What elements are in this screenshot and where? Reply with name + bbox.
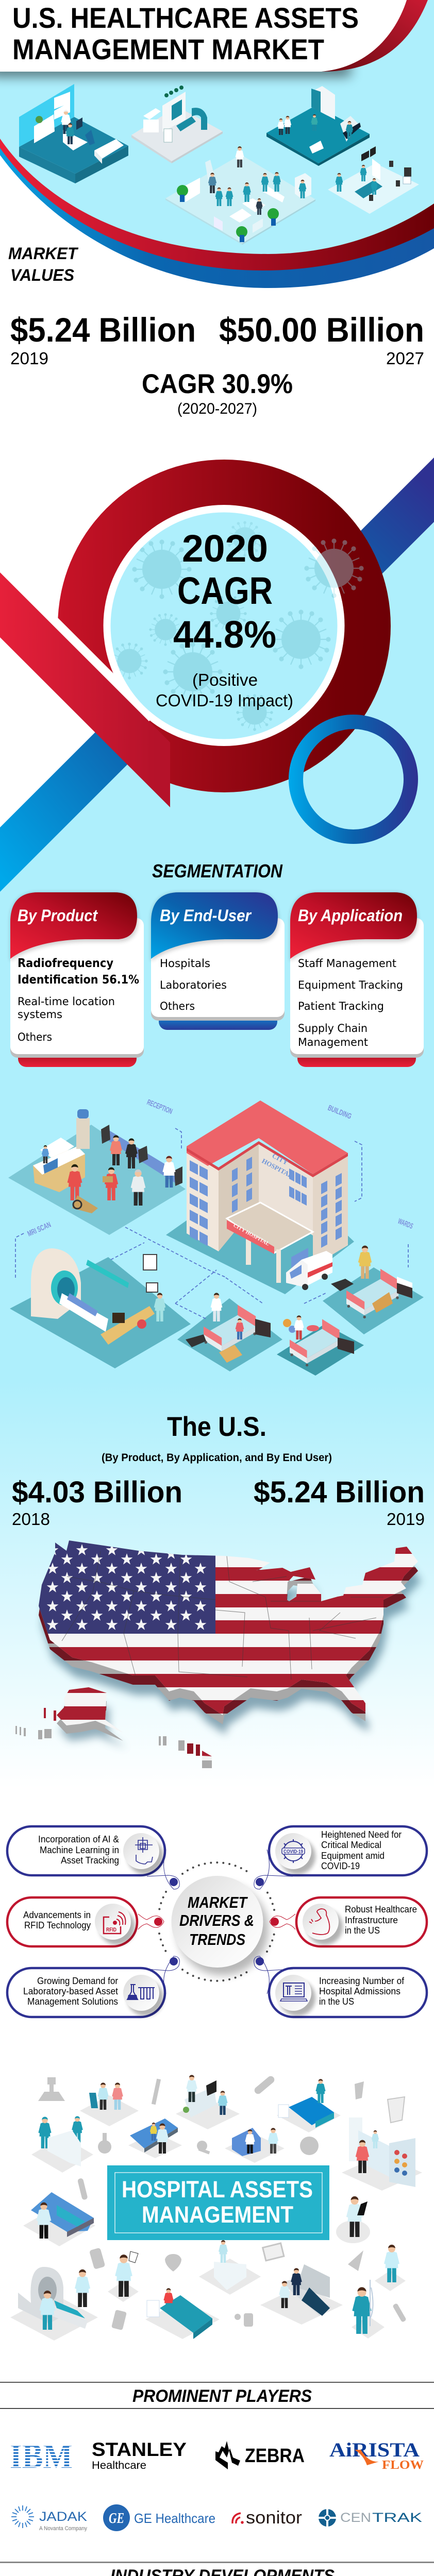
panel: by product: By Product bbox=[18, 906, 98, 925]
pill: laboratory-based solutions: Management Solutions bbox=[27, 1996, 118, 2007]
dotted ring bbox=[159, 1862, 274, 1981]
pill: critical medical equipment: Equipment amid bbox=[321, 1851, 385, 1861]
panel: by application: Equipment Tracking bbox=[298, 979, 403, 991]
panel: light-blue body background bbox=[0, 522, 434, 1803]
logo: AiRISTA Flow: AiRISTA bbox=[329, 2439, 420, 2461]
floors bbox=[10, 2095, 422, 2341]
stat: 2018 US value: 2018 bbox=[12, 1510, 50, 1529]
label: market values: MARKET bbox=[8, 244, 78, 263]
pill: AI and machine learning: Asset Tracking bbox=[61, 1855, 119, 1866]
logo: Jadak: JADAK bbox=[39, 2510, 87, 2524]
panel: by application: Staff Management bbox=[298, 957, 396, 970]
connector: dashed leader lines bbox=[15, 1128, 408, 1319]
illustration: isometric hospital scene bbox=[8, 1098, 424, 1376]
panel: by application: Supply Chain bbox=[298, 1022, 368, 1035]
callout: 2020 CAGR figures bbox=[156, 527, 293, 710]
panel: by end-user: Hospitals bbox=[160, 957, 210, 970]
pill: RFID technology: RFID Technology bbox=[24, 1920, 91, 1930]
pill: AI and machine learning: Incorporation of AI & bbox=[38, 1834, 119, 1844]
floor: lower-right ward bbox=[277, 1315, 364, 1376]
pill: RFID technology: Advancements in bbox=[23, 1910, 91, 1920]
pill: critical medical equipment: COVID-19 bbox=[283, 1849, 303, 1855]
logo: IBM: IBM bbox=[10, 2436, 73, 2476]
stat: 2027 market value: 2027 bbox=[386, 349, 424, 368]
building: city hospital: CITY bbox=[271, 1151, 290, 1166]
pill: laboratory-based solutions: Growing Demand for bbox=[37, 1976, 118, 1986]
center circle bbox=[171, 1876, 269, 1975]
logo: Sonitor: sonitor bbox=[246, 2508, 302, 2528]
panel: by application: Patient Tracking bbox=[298, 1000, 384, 1012]
pill: healthcare infrastructure: Robust Healthcare bbox=[345, 1904, 417, 1914]
floor: center ward bbox=[177, 1293, 282, 1371]
stat: 2019 market value bbox=[10, 311, 196, 368]
illustration: isometric MRI room bbox=[131, 86, 223, 163]
floor: wards bbox=[323, 1246, 424, 1334]
heading: the U.S.: The U.S. bbox=[167, 1412, 266, 1442]
map: USA flag-filled bbox=[15, 1535, 433, 1768]
title: U.S. HEALTHCARE ASSETS bbox=[12, 2, 359, 34]
stat: 2019 US value: 2019 bbox=[387, 1510, 425, 1529]
panel: by product: Radiofrequency bbox=[18, 957, 113, 970]
logo: Zebra: ZEBRA bbox=[245, 2445, 305, 2467]
callout: 2020 CAGR figures: (Positive bbox=[192, 670, 258, 689]
stat: 2019 market value: 2019 bbox=[10, 349, 48, 368]
panel: by end-user: By End-User bbox=[160, 906, 252, 925]
panel: hero header with curved ribbons bbox=[0, 0, 434, 288]
logo: CenTrak: CEN bbox=[340, 2511, 371, 2525]
banner: hospital assets management: MANAGEMENT bbox=[142, 2201, 293, 2228]
panel: by application bbox=[290, 892, 424, 1067]
panel: by product: Others bbox=[18, 1031, 52, 1043]
building: city hospital: HOSPITAL bbox=[261, 1157, 294, 1180]
floor: reception bbox=[8, 1109, 186, 1235]
people and equipment bbox=[18, 2075, 415, 2339]
pill: critical medical equipment bbox=[254, 1826, 427, 1889]
panel: by product: Identification 56.1% bbox=[18, 973, 139, 987]
center circle: MARKET bbox=[188, 1893, 248, 1911]
pill: RFID technology bbox=[7, 1897, 164, 1946]
heading: the U.S.: (By Product, By Application, and By End User) bbox=[102, 1452, 332, 1464]
illustration: isometric treatment room bbox=[266, 86, 370, 166]
label: reception: RECEPTION bbox=[146, 1098, 174, 1116]
callout: 2020 CAGR figures: 44.8% bbox=[173, 613, 276, 656]
building: city hospital: CITY HOSPITAL bbox=[232, 1223, 270, 1247]
graphic: red ring with circular covid callout bbox=[0, 460, 391, 807]
floor: MRI scan bbox=[10, 1248, 191, 1368]
illustration: isometric reception floor bbox=[165, 146, 315, 245]
panel: market drivers and trends bbox=[7, 1826, 427, 2017]
floor: building pad bbox=[166, 1196, 354, 1294]
stat: 2027 market value: $50.00 Billion bbox=[219, 311, 424, 349]
stat: CAGR 2020-2027 bbox=[142, 369, 293, 417]
illustration: isometric operating room bbox=[328, 146, 419, 214]
pill: AI and machine learning bbox=[7, 1826, 179, 1889]
pill: hospital admissions: Increasing Number of bbox=[319, 1976, 405, 1986]
stat: CAGR 2020-2027: (2020-2027) bbox=[177, 400, 257, 417]
graphic: diagonal blue band lower-left bbox=[0, 673, 219, 892]
pill: laboratory-based solutions: Laboratory-based Asset bbox=[23, 1986, 118, 1996]
center circle: DRIVERS & bbox=[179, 1911, 254, 1929]
pill: healthcare infrastructure: Infrastructure bbox=[345, 1915, 398, 1925]
logo: GE Healthcare: GE bbox=[109, 2511, 124, 2527]
stat: 2019 market value: $5.24 Billion bbox=[10, 311, 196, 349]
pill: critical medical equipment: Heightened Need for bbox=[321, 1829, 402, 1840]
logo: GE Healthcare bbox=[103, 2504, 215, 2531]
stat: 2019 US value: $5.24 Billion bbox=[254, 1476, 425, 1509]
logo: Stanley Healthcare: Healthcare bbox=[92, 2460, 146, 2471]
logo: Jadak: A Novanta Company bbox=[39, 2526, 87, 2532]
stat: 2019 US value bbox=[254, 1476, 425, 1529]
heading: segmentation: SEGMENTATION bbox=[152, 860, 283, 882]
title: MANAGEMENT MARKET bbox=[12, 33, 324, 65]
pill: critical medical equipment: COVID-19 bbox=[321, 1861, 360, 1871]
pill: critical medical equipment: Critical Medical bbox=[321, 1840, 381, 1850]
illustration: hospital assets vignettes bbox=[10, 2075, 422, 2341]
panel: by end-user bbox=[151, 892, 285, 1030]
callout: 2020 CAGR figures: COVID-19 Impact) bbox=[156, 691, 293, 710]
logo: CenTrak bbox=[319, 2509, 422, 2527]
title bbox=[12, 2, 359, 65]
logo: Stanley Healthcare bbox=[92, 2439, 187, 2471]
logo: Stanley Healthcare: STANLEY bbox=[92, 2439, 187, 2460]
pill: hospital admissions bbox=[254, 1956, 427, 2017]
building: city hospital bbox=[187, 1100, 348, 1283]
gray medical icons bbox=[38, 2075, 407, 2330]
pill: laboratory-based solutions bbox=[7, 1956, 179, 2017]
label: wards: WARDS bbox=[397, 1217, 414, 1231]
stat: 2027 market value bbox=[219, 311, 424, 368]
panel: by end-user: Others bbox=[160, 1000, 195, 1012]
label: MRI scan: MRI SCAN bbox=[26, 1221, 52, 1239]
banner: hospital assets management bbox=[107, 2165, 329, 2240]
banner: hospital assets management: HOSPITAL ASSETS bbox=[122, 2176, 313, 2202]
label: market values bbox=[8, 244, 78, 284]
stat: CAGR 2020-2027: CAGR 30.9% bbox=[142, 369, 293, 399]
logo: Zebra bbox=[215, 2441, 305, 2469]
graphic: diagonal blue band upper-right bbox=[271, 457, 434, 621]
panel: by application: Management bbox=[298, 1036, 368, 1048]
heading: industry developments bbox=[0, 2562, 434, 2576]
stat: 2018 US value: $4.03 Billion bbox=[12, 1476, 182, 1509]
logo: Jadak bbox=[11, 2505, 87, 2532]
pill: RFID technology: RFID bbox=[106, 1927, 116, 1933]
graphic: blue ring bbox=[296, 722, 411, 837]
callout: 2020 CAGR figures: 2020 bbox=[182, 527, 268, 570]
illustration: isometric clinic room with desk bbox=[19, 84, 128, 183]
panel: by product: systems bbox=[18, 1008, 62, 1021]
logo: CenTrak: TRAK bbox=[372, 2511, 422, 2525]
center circle: TRENDS bbox=[189, 1930, 245, 1948]
heading: prominent players: PROMINENT PLAYERS bbox=[132, 2386, 312, 2406]
callout: 2020 CAGR figures: CAGR bbox=[177, 569, 273, 612]
panel: by end-user: Laboratories bbox=[160, 979, 227, 991]
label: market values: VALUES bbox=[10, 266, 75, 284]
panel: by product: Real-time location bbox=[18, 995, 115, 1008]
logo: AiRISTA Flow bbox=[329, 2439, 424, 2472]
logo: GE Healthcare: GE Healthcare bbox=[134, 2511, 215, 2526]
pill: hospital admissions: in the US bbox=[319, 1996, 354, 2007]
pill: hospital admissions: Hospital Admissions bbox=[319, 1986, 400, 1996]
panel: by product bbox=[10, 892, 144, 1067]
heading: the U.S. bbox=[102, 1412, 332, 1464]
label: building: BUILDING bbox=[327, 1104, 353, 1121]
pill: healthcare infrastructure: in the US bbox=[345, 1925, 380, 1936]
panel: by application: By Application bbox=[298, 906, 403, 925]
pill: AI and machine learning: Machine Learning in bbox=[40, 1845, 119, 1855]
stat: 2018 US value bbox=[12, 1476, 182, 1529]
logo: AiRISTA Flow: FLOW bbox=[382, 2459, 424, 2472]
vehicle: ambulance bbox=[286, 1251, 332, 1290]
pill: healthcare infrastructure bbox=[270, 1897, 427, 1946]
